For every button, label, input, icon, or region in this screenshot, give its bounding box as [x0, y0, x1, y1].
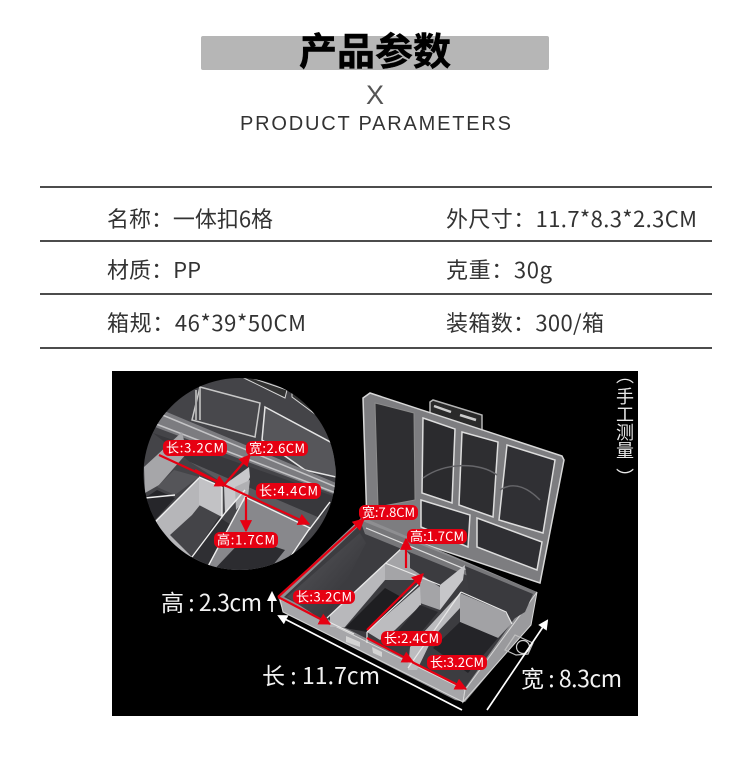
- label: length 2.4cm: 长:2.4CM: [384, 628, 439, 647]
- label: length 3.2cm in circle: 长:3.2CM: [166, 438, 224, 456]
- row 3 right: 装箱数：300/箱: [446, 306, 604, 338]
- label: height 1.7cm: 高:1.7CM: [410, 526, 464, 545]
- row 1 right: 外尺寸：11.7*8.3*2.3CM: [446, 202, 697, 234]
- product photo panel: [112, 366, 638, 716]
- decorative x mark: X: [366, 80, 384, 110]
- subtitle: PRODUCT PARAMETERS: [240, 113, 511, 135]
- row 3 left: 箱规：46*39*50CM: [107, 306, 306, 338]
- title: [201, 32, 549, 74]
- divider walls: [330, 563, 385, 627]
- vertical note: 手工测量: [614, 387, 634, 459]
- vertical note: （: [614, 366, 634, 384]
- compartment: left long: [287, 533, 366, 623]
- label: length 3.2cm left: 长:3.2CM: [296, 586, 352, 606]
- row 2 left: 材质：PP: [107, 253, 201, 285]
- magnified circle: [140, 375, 340, 575]
- label: width 7.8cm: 宽:7.8CM: [362, 502, 415, 521]
- overall height: 高 : 2.3cm: [161, 584, 262, 618]
- box base: [278, 517, 537, 702]
- dimension arrows in red: [159, 455, 466, 689]
- box lid: [363, 393, 564, 583]
- vertical note: [614, 366, 634, 486]
- title: 产品参数: [299, 32, 451, 74]
- dimension arrows in white: [272, 593, 547, 710]
- overall length: 长 : 11.7cm: [262, 657, 380, 691]
- overall width: 宽 : 8.3cm: [521, 660, 622, 694]
- parameter table: [40, 187, 712, 348]
- label: length 4.4cm: 长:4.4CM: [259, 480, 318, 500]
- row 1 left: 名称：一体扣6格: [107, 202, 273, 234]
- vertical note: ）: [614, 468, 634, 486]
- label: length 3.2cm right: 长:3.2CM: [430, 652, 484, 671]
- row 2 right: 克重：30g: [446, 253, 553, 285]
- label: height 1.7cm in circle: 高:1.7CM: [217, 530, 275, 548]
- label: width 2.6cm: 宽:2.6CM: [249, 438, 305, 457]
